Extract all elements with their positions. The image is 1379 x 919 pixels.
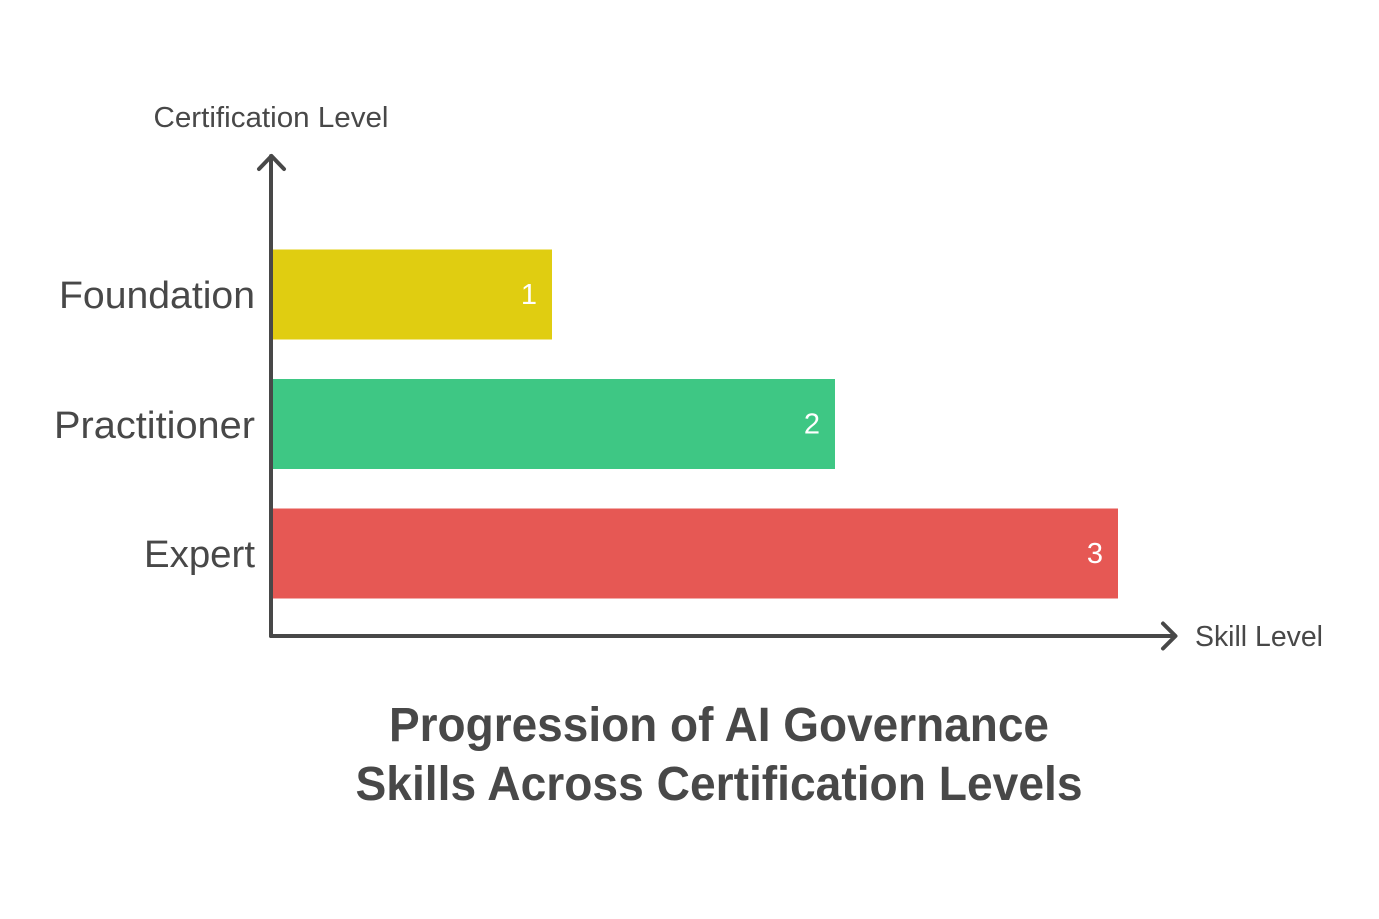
y-axis arrow [259, 156, 284, 636]
category label: Practitioner: Practitioner [54, 405, 255, 447]
y-axis title: Certification Level [154, 102, 388, 134]
category label: Foundation: Foundation [59, 275, 255, 317]
title: Progression of AI Governance [389, 699, 1049, 752]
bar: Expert: 3 [1087, 538, 1103, 570]
bar: Practitioner [273, 379, 835, 469]
bar: Foundation [273, 250, 552, 340]
title: Skills Across Certification Levels [356, 758, 1082, 811]
bar: Expert [273, 508, 1118, 598]
category label: Expert: Expert [144, 534, 255, 576]
bar: Foundation: 1 [521, 279, 537, 311]
x-axis arrow [271, 624, 1176, 648]
x-axis title: Skill Level [1195, 621, 1323, 653]
bar: Practitioner: 2 [804, 408, 820, 440]
title [356, 699, 1082, 811]
